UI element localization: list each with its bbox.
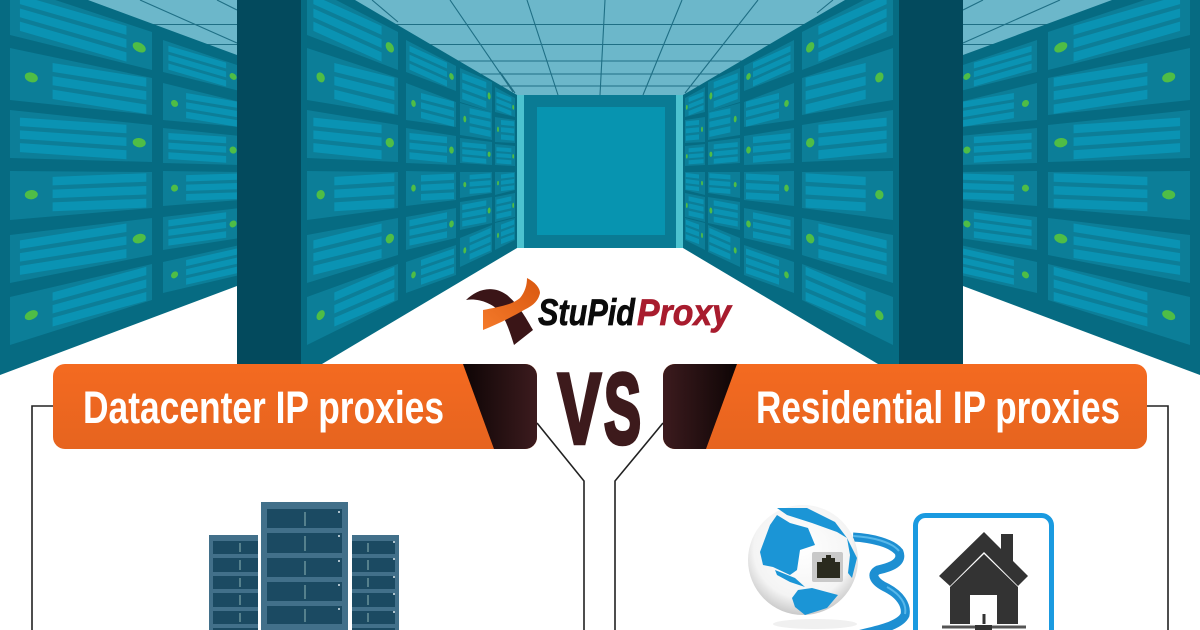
logo wordmark accent: Proxy	[637, 292, 733, 333]
globe shadow	[773, 619, 857, 629]
ethernet port	[812, 552, 843, 582]
header bar: datacenter	[53, 364, 537, 449]
VS label: S	[604, 353, 641, 464]
logo wordmark: StuPid	[538, 292, 636, 333]
header bar: residential	[663, 364, 1147, 449]
server rack wall: left outer	[0, 0, 240, 375]
VS label: V	[558, 353, 601, 464]
house body	[950, 554, 1018, 624]
ceiling	[0, 0, 1200, 100]
continents	[760, 508, 857, 615]
pillar: left	[237, 0, 301, 364]
icon: server racks	[209, 502, 399, 630]
pillar: right	[899, 0, 963, 364]
logo icon	[466, 278, 540, 345]
server rack wall: right outer	[960, 0, 1200, 375]
connector lines: left panel frame	[32, 406, 584, 630]
network cable	[853, 536, 905, 630]
door	[970, 595, 997, 625]
header label: datacenter: Datacenter IP proxies	[83, 382, 444, 433]
connector lines: right panel frame	[615, 406, 1168, 630]
server rack wall: left inner	[301, 0, 517, 364]
icon: house in blue frame	[916, 516, 1052, 630]
logo: StupidProxy	[466, 278, 733, 345]
globe	[748, 505, 858, 615]
back wall of the aisle	[517, 95, 683, 248]
house roof	[939, 532, 1028, 586]
icon: globe with network cable	[748, 505, 905, 630]
server rack wall: right inner	[683, 0, 899, 364]
